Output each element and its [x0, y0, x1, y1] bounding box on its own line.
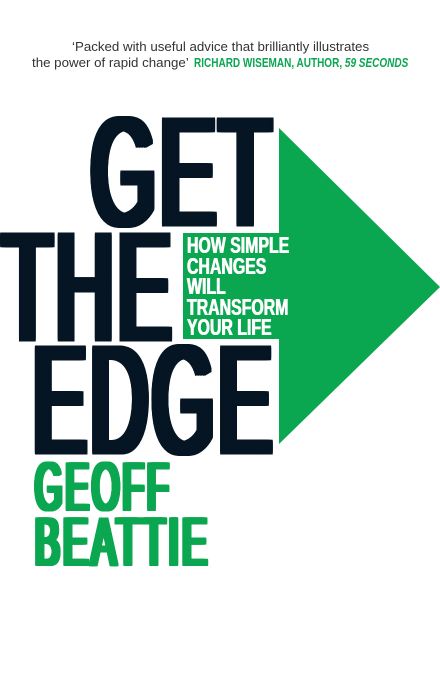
subtitle [186, 232, 289, 340]
author: BEATTIE: BEATTIE [35, 504, 210, 580]
quote attribution: RICHARD WISEMAN, AUTHOR, 59 SECONDS [194, 55, 408, 70]
quote line 1: ‘Packed with useful advice that brilliantly illustrates [72, 39, 369, 54]
subtitle line 5: YOUR LIFE [187, 314, 272, 340]
title: GET: GET [91, 86, 275, 258]
subtitle line 2: CHANGES [187, 253, 266, 279]
title: THE: THE [3, 201, 175, 373]
author: GEOFF: GEOFF [35, 449, 172, 525]
subtitle line 1: HOW SIMPLE [187, 232, 289, 258]
quote line 2: the power of rapid change’ [32, 55, 189, 70]
quote [32, 39, 408, 70]
title: EDGE: EDGE [33, 314, 276, 486]
subtitle line 4: TRANSFORM [187, 294, 288, 320]
subtitle line 3: WILL [187, 273, 226, 299]
